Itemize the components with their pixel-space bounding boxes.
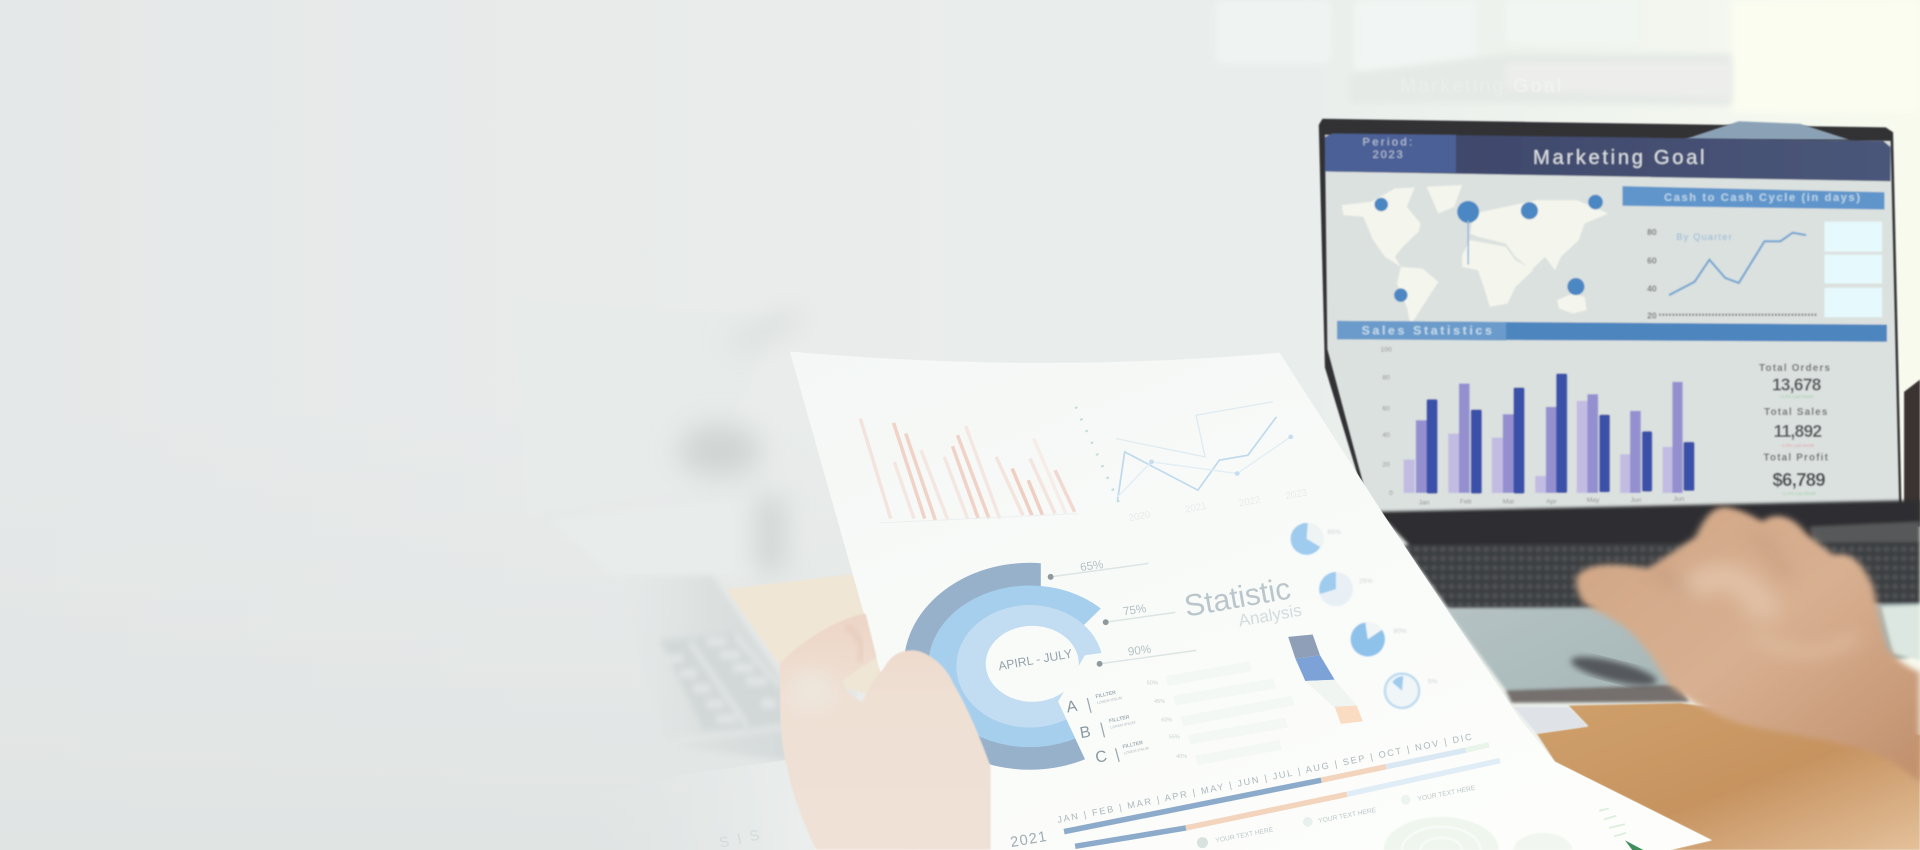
pale desk behind paper xyxy=(726,571,882,698)
legend percent bars xyxy=(1147,661,1294,765)
legend A B C: A xyxy=(1065,698,1079,716)
legend percent bars: 50% xyxy=(1147,681,1158,687)
banner illustration xyxy=(662,0,1920,850)
statistics totals: 13,678 xyxy=(1772,375,1821,395)
radial donut chart xyxy=(905,562,1102,770)
fingers xyxy=(780,614,991,850)
bar chart axis labels: 80 xyxy=(1382,375,1390,382)
wall shadows xyxy=(678,316,800,572)
timeline months: JAN | FEB | MAR | APR | MAY | JUN | JUL | AUG | SEP | OCT | NOV | DIC xyxy=(1056,732,1473,825)
stacked column xyxy=(1288,634,1363,724)
green paper corner xyxy=(1625,840,1643,850)
legend A B C: FILLTER xyxy=(1095,690,1117,700)
statistic analysis title: Analysis xyxy=(1237,600,1303,630)
hinge highlight xyxy=(1810,522,1920,543)
statistics totals: Total Sales xyxy=(1764,407,1829,418)
legend A B C: FILLTER xyxy=(1109,714,1130,725)
index card under laptop xyxy=(1513,707,1588,734)
window reflections top right xyxy=(1216,0,1920,113)
line chart year labels: 2023 xyxy=(1285,487,1309,502)
keyboard xyxy=(1403,542,1920,609)
pie icons xyxy=(1291,523,1437,708)
line chart by quarter: 80 xyxy=(1647,227,1657,237)
cash cycle heading: Cash to Cash Cycle (in days) xyxy=(1664,192,1860,204)
window reflections top right: Marketing Goal xyxy=(1400,75,1563,97)
legend A B C xyxy=(1065,690,1149,767)
knuckle highlight xyxy=(791,670,834,710)
screen header: Marketing Goal xyxy=(1533,147,1704,169)
line chart year labels: 2020 xyxy=(1128,509,1152,524)
legend labels: YOUR TEXT HERE xyxy=(1318,807,1377,825)
kpi boxes xyxy=(1824,222,1882,317)
timeline bars xyxy=(1064,745,1500,846)
bar chart axis labels: Jan xyxy=(1419,500,1430,507)
laptop edge right xyxy=(1904,380,1920,527)
hinge xyxy=(1377,500,1920,547)
pie icons: 65% xyxy=(1327,529,1341,536)
paper line chart xyxy=(1076,402,1293,510)
statistics totals xyxy=(1759,363,1831,496)
legend A B C: B xyxy=(1079,724,1092,742)
legend labels: YOUR TEXT HERE xyxy=(1215,826,1274,845)
statistics totals: -4.8% Last Month xyxy=(1781,443,1815,448)
bar chart axis labels: Apr xyxy=(1546,498,1557,505)
statistic analysis title: Statistic xyxy=(1182,572,1293,624)
statistics totals: +3.5% Last Month xyxy=(1779,394,1814,399)
donut callouts: 75% xyxy=(1122,602,1147,618)
statistics totals: +2.4% Last Month xyxy=(1782,491,1817,496)
line chart by quarter xyxy=(1647,227,1817,320)
laptop base and keyboard xyxy=(1377,500,1920,703)
statistics paper xyxy=(790,352,1712,850)
legend percent bars: 60% xyxy=(1161,717,1173,723)
legend A B C: LOREM IPSUM xyxy=(1110,720,1136,730)
bar chart axis labels: Feb xyxy=(1460,498,1472,505)
donut callouts xyxy=(1048,558,1196,667)
blurred plant pot xyxy=(513,298,784,576)
bar chart axis labels: 60 xyxy=(1382,405,1390,412)
bar chart axis labels: 20 xyxy=(1382,462,1390,469)
radar chart xyxy=(1384,817,1572,850)
paper bar chart xyxy=(860,418,1078,523)
legend A B C: LOREM IPSUM xyxy=(1097,696,1122,705)
lower left sheet xyxy=(588,757,833,850)
hand shading xyxy=(1656,533,1854,653)
left hand holding paper xyxy=(780,614,991,850)
legend percent bars: 55% xyxy=(1169,735,1180,741)
line chart by quarter: 40 xyxy=(1647,283,1657,293)
laptop screen reflection xyxy=(1684,121,1849,140)
legend labels: YOUR TEXT HERE xyxy=(1417,785,1477,803)
legend A B C: FILLTER xyxy=(1122,740,1144,750)
bar chart xyxy=(1404,374,1695,494)
bar chart axis labels: May xyxy=(1587,497,1600,504)
pale desk beside laptop xyxy=(1881,605,1920,660)
line chart by quarter: 20 xyxy=(1647,310,1657,320)
bar chart axis labels xyxy=(1381,347,1684,507)
bar chart axis labels: 0 xyxy=(1389,490,1393,497)
screen header: Period: xyxy=(1363,137,1415,149)
line chart by quarter: By Quarter xyxy=(1676,232,1733,242)
bar chart axis labels: Jun xyxy=(1673,496,1684,503)
palm rest xyxy=(1446,604,1920,690)
screen surface xyxy=(1325,135,1899,514)
wooden desk xyxy=(1537,703,1920,850)
line chart year labels: 2022 xyxy=(1238,495,1261,509)
cash cycle heading xyxy=(1622,186,1884,209)
screen header: 2023 xyxy=(1373,149,1404,161)
right hand on keyboard xyxy=(1576,507,1920,782)
legend percent bars: 45% xyxy=(1154,699,1165,705)
legend percent bars: 40% xyxy=(1176,754,1187,760)
laptop screen xyxy=(1325,134,1899,514)
sales statistics heading xyxy=(1337,321,1887,342)
bar chart axis labels: Jun xyxy=(1630,497,1642,504)
statistics totals: 11,892 xyxy=(1774,421,1822,441)
statistics totals: Total Orders xyxy=(1759,363,1831,374)
paper sheet xyxy=(790,352,1712,850)
blurred keyboard xyxy=(617,576,790,761)
bar chart axis labels: 100 xyxy=(1381,347,1392,354)
legend A B C: C xyxy=(1094,748,1108,767)
line chart year labels xyxy=(1128,487,1309,524)
line chart by quarter: 60 xyxy=(1647,255,1657,265)
pie icons: 5% xyxy=(1428,678,1437,685)
screen header xyxy=(1325,134,1891,181)
pie icons: 25% xyxy=(1359,578,1373,585)
legend labels xyxy=(1197,785,1477,848)
sales statistics heading: Sales Statistics xyxy=(1362,323,1495,337)
base edge xyxy=(1506,684,1689,703)
trackpad shadow xyxy=(1569,651,1659,691)
line chart year labels: 2021 xyxy=(1184,501,1208,516)
donut callouts: 65% xyxy=(1079,558,1104,574)
bar chart axis labels: 40 xyxy=(1382,432,1390,439)
small green list xyxy=(1599,808,1626,837)
thumb crease xyxy=(846,627,862,660)
legend A B C: LOREM IPSUM xyxy=(1123,746,1149,755)
map pins xyxy=(1374,195,1603,302)
statistics totals: Total Profit xyxy=(1764,453,1829,464)
pie icons: 80% xyxy=(1393,628,1407,635)
radial donut chart: APIRL - JULY xyxy=(997,647,1073,673)
statistics totals: $6,789 xyxy=(1773,469,1825,490)
donut callouts: 90% xyxy=(1127,643,1152,659)
world map xyxy=(1342,185,1608,325)
bar chart axis labels: Mar xyxy=(1503,498,1515,505)
laptop frame xyxy=(1319,119,1902,521)
